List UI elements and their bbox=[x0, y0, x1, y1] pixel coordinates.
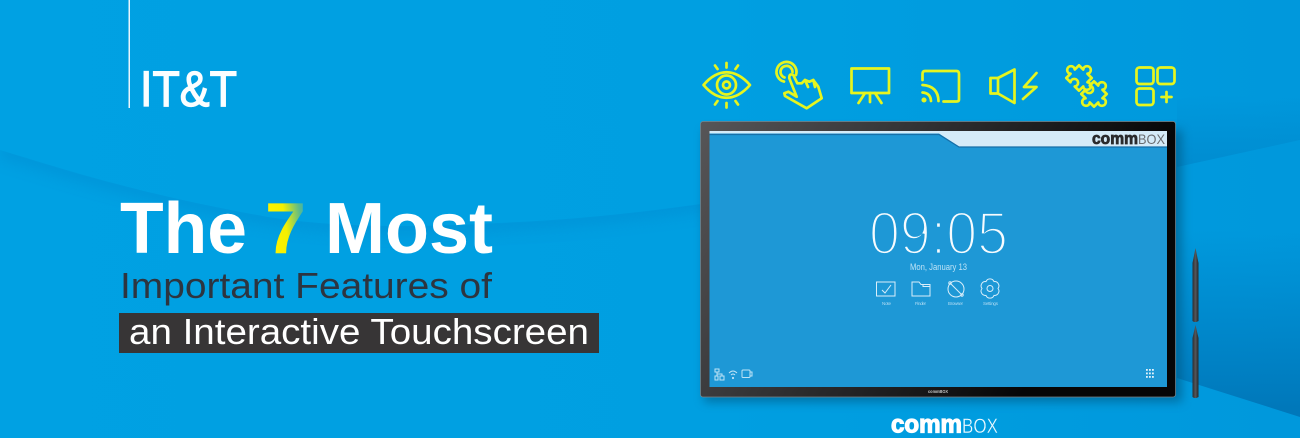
heading: The 7 Most bbox=[120, 189, 493, 269]
heading: The 7 Most: Most bbox=[325, 189, 493, 269]
logo: IT&T: IT&T bbox=[140, 61, 237, 117]
brand logo: commBOX: comm bbox=[891, 410, 962, 438]
app: Browser: Browser bbox=[948, 301, 964, 306]
status icons bbox=[715, 369, 752, 380]
date: Mon, January 13 bbox=[910, 262, 967, 272]
app: Settings: Settings bbox=[983, 301, 999, 306]
bezel logo: commBOX bbox=[928, 389, 948, 394]
icon: screencast bbox=[922, 71, 959, 102]
monitor shadow bbox=[704, 130, 1182, 402]
monitor bezel bbox=[700, 122, 1176, 397]
brand logo: commBOX bbox=[891, 410, 998, 438]
background bbox=[16, 96, 1300, 417]
app icons bbox=[876, 279, 999, 306]
pen: lower bbox=[1192, 325, 1198, 398]
screen header strip: comm bbox=[1092, 129, 1138, 148]
app: Note: Note bbox=[882, 301, 891, 306]
icon: presentation board bbox=[852, 68, 889, 103]
app grid icon bbox=[1146, 369, 1154, 378]
clock: 09:05 bbox=[869, 200, 1008, 267]
icon: apps plus bbox=[1136, 68, 1174, 105]
subheading: Important Features of bbox=[120, 265, 493, 306]
icon: puzzle pieces bbox=[1062, 57, 1115, 115]
pen: upper bbox=[1192, 248, 1198, 322]
heading: The 7 Most: The bbox=[120, 189, 247, 269]
app: Finder: Finder bbox=[915, 301, 926, 306]
screen header strip bbox=[710, 129, 1167, 148]
screen bbox=[710, 131, 1167, 387]
highlighted subheading: an Interactive Touchscreen bbox=[129, 311, 589, 352]
logo: IT&T bbox=[128, 0, 237, 117]
title bbox=[119, 189, 599, 353]
icon: touch hand bbox=[776, 62, 822, 108]
stylus pens bbox=[1192, 248, 1198, 398]
screen header strip: BOX bbox=[1138, 131, 1166, 147]
feature icons bbox=[704, 57, 1174, 115]
icon: speaker and lightning bbox=[990, 70, 1036, 103]
brand logo: commBOX: BOX bbox=[962, 415, 998, 438]
icon: eye bbox=[704, 63, 750, 108]
heading: The 7 Most: 7 bbox=[265, 189, 306, 269]
touchscreen display bbox=[700, 122, 1182, 402]
